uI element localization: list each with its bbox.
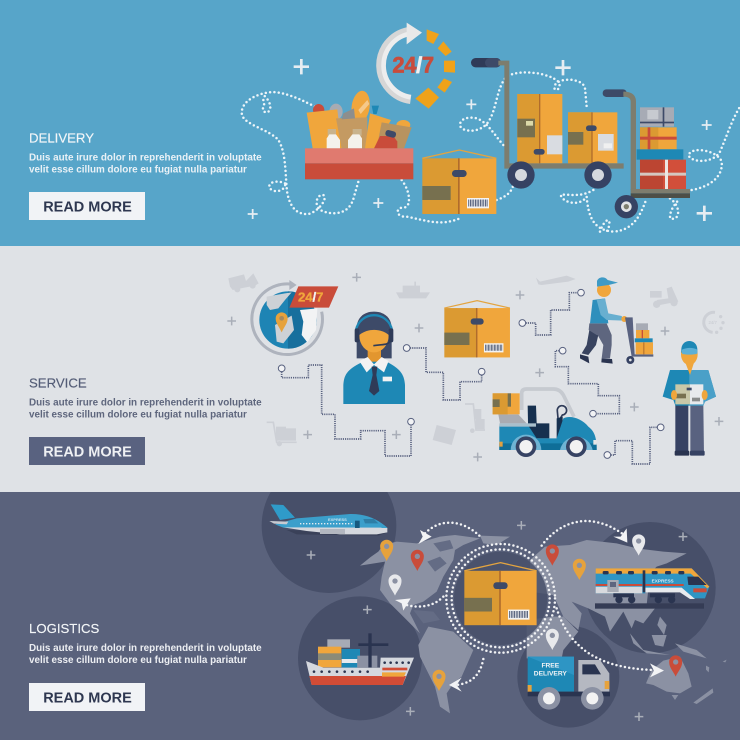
icon: 24/7 globe: 24/7: [298, 290, 323, 305]
text block: logistics description: velit esse cillum dolore eu fugiat nulla pariatur: [29, 655, 247, 666]
icon: cargo ship: [306, 633, 414, 685]
figure: courier holding box: [663, 341, 716, 456]
central dark circle: [454, 552, 547, 645]
button: read more: READ MORE: [43, 690, 132, 706]
button: read more: [29, 683, 145, 711]
dotted routes: [242, 72, 740, 232]
icon: 24/7 clock arrow: 24/7: [392, 52, 434, 77]
arrowheads: [395, 528, 664, 692]
icon: 24/7 globe: [252, 280, 338, 355]
ghost icons: [228, 273, 725, 446]
plus signs: [307, 521, 687, 721]
map shade details: [413, 540, 453, 623]
heading: delivery: DELIVERY: [29, 130, 94, 146]
dotted step connectors: [278, 289, 664, 464]
plus signs: [248, 59, 712, 221]
world map: [360, 535, 727, 713]
icon: central box: [464, 563, 537, 625]
figure: call centre agent: [343, 312, 405, 404]
plus signs: [227, 273, 723, 461]
button: read more: [29, 192, 145, 220]
icon: free delivery truck: [528, 657, 610, 710]
dark circles: [262, 492, 716, 728]
button: read more: READ MORE: [43, 444, 132, 460]
location pins: [380, 534, 682, 691]
icon: 24/7 clock arrow: [381, 23, 455, 109]
illustration: service: [227, 273, 725, 464]
icon: express train: EXPRESS: [652, 579, 674, 584]
icon: cardboard box: [422, 150, 496, 214]
dotted routes: [407, 521, 653, 685]
icon: free delivery truck: DELIVERY: [534, 671, 567, 678]
icon: large hand truck: [471, 58, 624, 189]
text block: delivery description: velit esse cillum dolore eu fugiat nulla pariatur: [29, 164, 247, 176]
text block: service description: velit esse cillum dolore eu fugiat nulla pariatur: [29, 410, 247, 420]
figure: worker pushing cart: [580, 277, 653, 364]
illustration: logistics: [262, 492, 727, 728]
icon: cardboard box: [444, 301, 510, 357]
panel: service: [0, 246, 740, 493]
icon: express train: [595, 568, 709, 609]
icon: free delivery truck: FREE: [541, 663, 560, 670]
heading: logistics: LOGISTICS: [29, 621, 100, 636]
icon: airplane: EXPRESS: [328, 517, 347, 522]
text block: service description: Duis aute irure dolor in reprehenderit in voluptate: [29, 398, 262, 408]
figure: driver cart with box: [493, 389, 597, 457]
icon: grocery basket: [305, 90, 413, 179]
heading: service: SERVICE: [29, 376, 87, 390]
text block: delivery description: Duis aute irure dolor in reprehenderit in voluptate: [29, 152, 262, 164]
panel: delivery: [0, 0, 740, 246]
ghost icons: 24/7: [708, 320, 717, 325]
button: read more: READ MORE: [43, 200, 132, 216]
icon: airplane: [269, 504, 387, 536]
text block: logistics description: Duis aute irure dolor in reprehenderit in voluptate: [29, 643, 262, 654]
icon: small hand truck with gifts: [603, 89, 690, 218]
panel: logistics: [0, 492, 740, 740]
illustration: delivery: [242, 23, 740, 232]
button: read more: [29, 437, 145, 465]
